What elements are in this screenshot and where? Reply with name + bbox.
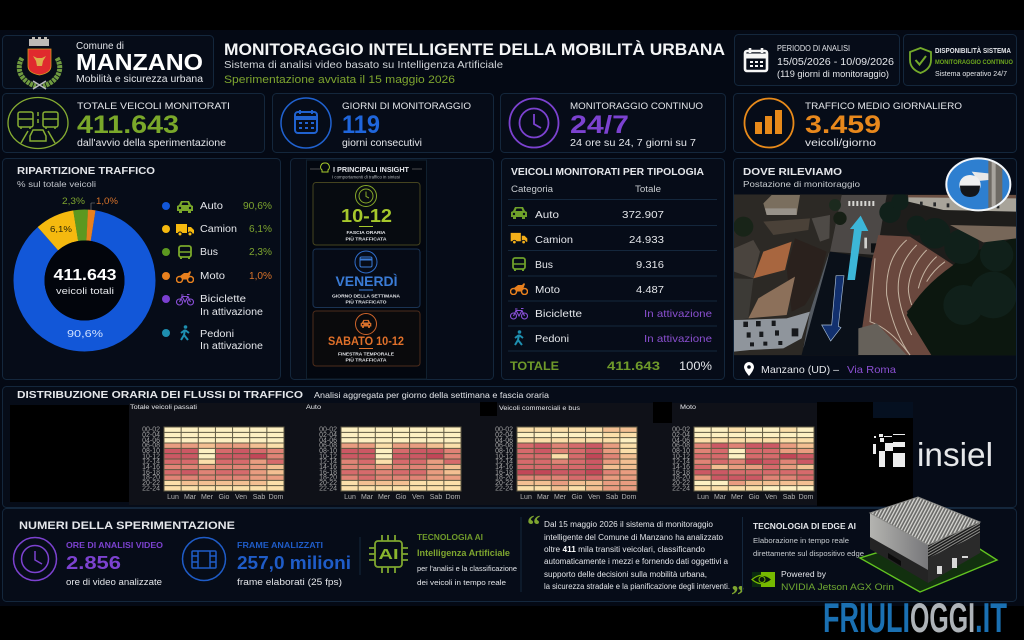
heatmap: moto: 06-08 [672,443,690,450]
icon: blue calendar [281,98,331,148]
donut chart: 411.643 [54,267,117,284]
edge AI text: TECNOLOGIA DI EDGE AI [753,521,856,531]
heatmap: veicoli commerciali e bus: Mer [554,494,567,501]
panel: distribuzione oraria [2,386,1016,508]
table heading [511,166,704,194]
watermark: FriuliOggi.it: .IT [975,594,1007,640]
KPI text: 3.459 [805,111,881,139]
inset: surveillance camera [945,157,1012,212]
heatmap: moto: Sab [783,494,795,501]
heatmap: auto: 12-14 [319,459,337,466]
table rows: Biciclette [535,308,582,320]
stat: frame analizzati: frame elaborati (25 fps) [237,577,342,587]
KPI card: traffico medio giornaliero [734,94,1016,152]
quote text: “ [527,510,540,540]
powered by text: Powered by [781,569,827,579]
heatmap: moto: 04-06 [672,437,690,444]
KPI text: MONITORAGGIO CONTINUO [570,101,703,112]
table total [510,359,712,373]
table total: 411.643 [607,359,660,373]
icon: purple clock [510,98,558,148]
legend: Pedoni [200,329,234,340]
watermark: FriuliOggi.it: FRIULI [823,594,910,640]
table heading: Categoria [511,184,553,194]
table rows: Camion [535,234,573,246]
table rows: In attivazione [644,333,712,345]
location caption: Manzano (UD) – [761,364,839,376]
insight card: sabato [313,311,420,366]
heatmap: auto: 14-16 [319,464,337,471]
heatmap: totale veicoli passati: 10-12 [142,453,160,460]
heatmap: veicoli commerciali e bus: Ven [588,494,600,501]
heatmap: totale veicoli passati: Lun [167,494,179,501]
header panel: comune di Manzano [2,36,214,89]
stat: tecnologia AI: dei veicoli in tempo reale [417,580,506,587]
table heading: VEICOLI MONITORATI PER TIPOLOGIA [511,166,704,178]
heatmap: auto: 22-24 [319,485,337,492]
legend: Camion [200,224,237,235]
donut chart: 2,3% [62,196,85,206]
insight card: fascia oraria: FASCIA ORARIA [346,230,386,236]
heatmap: moto: 08-10 [672,448,690,455]
KPI text: 411.643 [77,111,179,139]
panel: disponibilità sistema [904,34,1016,86]
heatmap: moto: Mer [731,494,744,501]
heatmap: moto: 18-20 [672,475,690,482]
insight card: fascia oraria [313,182,420,245]
quote text: oltre 411 mila transiti veicolari, classificando [544,545,706,554]
heading: RIPARTIZIONE TRAFFICO [17,165,155,177]
heatmap: moto: 20-22 [672,480,690,487]
heatmap: totale veicoli passati: Ven [235,494,247,501]
KPI text: TRAFFICO MEDIO GIORNALIERO [805,101,962,112]
heatmap: auto: 02-04 [319,432,337,439]
municipality name [76,40,203,85]
heatmap: veicoli commerciali e bus: Sab [606,494,618,501]
legend [162,201,272,352]
period text: (119 giorni di monitoraggio) [777,69,889,80]
table rows [510,207,712,345]
KPI text: dall'avvio della sperimentazione [77,138,226,149]
donut chart: 90,6% [67,329,103,340]
heatmap: auto: 00-02 [319,426,337,434]
KPI text: 24 ore su 24, 7 giorni su 7 [570,138,696,149]
heatmap: totale veicoli passati: 06-08 [142,443,160,450]
legend: 6,1% [249,224,272,235]
KPI text: GIORNI DI MONITORAGGIO [342,101,471,112]
quote text: la sicurezza stradale e la pianificazione degli interventi. [544,582,730,591]
panel: ripartizione traffico [2,158,280,380]
heatmap: totale veicoli passati: 12-14 [142,459,160,466]
heatmap: auto: Lun [344,494,356,501]
KPI text: veicoli/giorno [805,138,877,149]
table rows: 9.316 [636,259,664,271]
heatmap: moto: Lun [697,494,709,501]
heatmap: auto: 04-06 [319,437,337,444]
legend: Bus [200,247,218,258]
powered by text [781,569,894,593]
insight card: sabato: PIÙ TRAFFICATA [346,356,387,364]
legend: Moto [200,271,225,282]
icon: calendar [745,48,767,71]
heatmap: veicoli commerciali e bus: Lun [520,494,532,501]
heatmap: totale veicoli passati: 22-24 [142,485,160,492]
KPI text [805,101,962,149]
heatmap: auto: Dom [446,494,461,501]
stat: tecnologia AI: TECNOLOGIA AI [417,533,483,542]
heatmap: totale veicoli passati: 08-10 [142,448,160,455]
donut chart: 1,0% [96,196,118,206]
heatmap: totale veicoli passati: 04-06 [142,437,160,444]
heatmap: veicoli commerciali e bus: 02-04 [495,432,513,439]
heatmap: auto: 10-12 [319,453,337,460]
insight card: fascia oraria: 10-12 [341,206,392,226]
availability text: MONITORAGGIO CONTINUO [935,59,1013,66]
heading [17,389,549,401]
heatmap: totale veicoli passati: 00-02 [142,426,160,434]
insight heading: I comportamenti di traffico in sintesi [332,174,400,180]
table rows: Auto [535,209,559,221]
heatmap: auto: Ven [412,494,424,501]
heading: Analisi aggregata per giorno della settimana e fascia oraria [314,390,549,400]
KPI text: 119 [342,111,380,139]
heatmap: auto: 06-08 [319,443,337,450]
heatmap: veicoli commerciali e bus: Veicoli commerciali e bus [499,405,581,412]
availability text: DISPONIBILITÀ SISTEMA [935,46,1011,55]
stat: frame analizzati [182,538,351,587]
heading: DISTRIBUZIONE ORARIA DEI FLUSSI DI TRAFFICO [17,389,303,401]
panel: numeri della sperimentazione [2,508,1016,610]
heading: NUMERI DELLA SPERIMENTAZIONE [19,520,235,532]
heatmap: auto: Gio [396,494,407,501]
arrow: down (navy) [822,276,844,341]
legend: 2,3% [249,247,272,258]
heatmap: totale veicoli passati: 02-04 [142,432,160,439]
table rows: 372.907 [622,209,664,221]
table rows: 4.487 [636,284,664,296]
device: NVIDIA Jetson box [860,497,997,592]
heatmap: veicoli commerciali e bus: 00-02 [495,426,513,434]
heatmap: totale veicoli passati: 18-20 [142,475,160,482]
heatmap: totale veicoli passati: 16-18 [142,469,160,476]
quote text: intelligente del Comune di Manzano ha analizzato [544,533,724,542]
KPI card: monitoraggio continuo [500,94,726,152]
period text [777,44,894,80]
KPI card: giorni di monitoraggio [272,94,494,152]
KPI text: giorni consecutivi [342,138,422,149]
table rows: Moto [535,284,560,296]
heatmap: auto: 16-18 [319,469,337,476]
heatmap: veicoli commerciali e bus: 04-06 [495,437,513,444]
title block: MONITORAGGIO INTELLIGENTE DELLA MOBILITÀ URBANA [224,40,725,59]
arrow: up (cyan) [847,216,868,280]
insight card: venerdì: GIORNO DELLA SETTIMANA [332,294,401,300]
insight card: sabato: SABATO 10-12 [328,336,404,348]
legend: 1,0% [249,271,272,282]
heatmap: auto: 18-20 [319,475,337,482]
KPI text: 24/7 [570,111,629,139]
insight heading: I PRINCIPALI INSIGHT [333,165,409,174]
icon: shield check [910,48,931,73]
table total: TOTALE [510,359,559,373]
icon: orange bar chart [744,98,794,148]
municipality name: Mobilità e sicurezza urbana [76,74,203,85]
quote text: automaticamente i mezzi e fornendo dati oggettivi a [544,557,729,566]
stat: ore di analisi video: ORE DI ANALISI VIDEO [66,541,163,550]
quote text [527,510,744,610]
KPI text: TOTALE VEICOLI MONITORATI [77,101,230,112]
heatmap: totale veicoli passati: Sab [253,494,265,501]
legend: Biciclette [200,294,247,305]
insight card: venerdì [313,249,420,308]
heatmap: auto [306,404,461,501]
stat: tecnologia AI [369,533,517,587]
legend: In attivazione [200,307,263,318]
panel: veicoli monitorati per tipologia [502,158,724,380]
table rows: 24.933 [629,234,664,246]
legend: Auto [200,201,223,212]
heatmap: moto: 22-24 [672,485,690,492]
insiel logo: insiel [917,436,993,473]
table total: 100% [679,361,712,373]
period text: 15/05/2026 - 10/09/2026 [777,57,894,68]
table rows: Pedoni [535,333,569,345]
heatmap: totale veicoli passati: 20-22 [142,480,160,487]
KPI text [77,101,230,149]
heatmap: moto [672,404,814,501]
title block [224,40,725,86]
heatmap: moto: 00-02 [672,426,690,434]
heatmap: totale veicoli passati: Totale veicoli passati [130,404,198,411]
heatmap: veicoli commerciali e bus: 16-18 [495,469,513,476]
stat: ore di analisi video: ore di video analizzate [66,577,162,587]
table heading: Totale [635,184,661,194]
heatmap: veicoli commerciali e bus: 22-24 [495,485,513,492]
heading: DOVE RILEVIAMO [743,166,842,178]
heatmap: totale veicoli passati: Gio [219,494,230,501]
heading [743,166,860,189]
heatmap: veicoli commerciali e bus [495,405,637,501]
location caption: Via Roma [847,364,896,376]
stat: tecnologia AI: per l'analisi e la classificazione [417,566,517,573]
heatmap: totale veicoli passati: Mer [201,494,214,501]
KPI text [570,101,703,149]
table rows: Bus [535,259,553,271]
heatmap: auto: 20-22 [319,480,337,487]
municipality name: MANZANO [76,49,203,75]
heatmap: moto: 12-14 [672,459,690,466]
location caption [744,362,896,376]
heatmap: moto: Moto [680,404,696,411]
title block: Sperimentazione avviata il 15 maggio 2026 [224,74,455,86]
period text: PERIODO DI ANALISI [777,44,850,53]
availability text [935,46,1013,78]
stat: frame analizzati: 257,0 milioni [237,553,351,573]
heatmap: auto: 08-10 [319,448,337,455]
donut chart [6,196,163,359]
insight card: sabato: FINESTRA TEMPORALE [338,352,395,358]
heatmap: auto: Mer [378,494,391,501]
heatmap: auto: Sab [430,494,442,501]
heatmap: totale veicoli passati: Mar [184,494,197,501]
insiel logo [817,402,993,506]
heatmap: totale veicoli passati [130,404,284,501]
panel: periodo di analisi [734,34,900,86]
quote text: supporto delle decisioni sulla mobilità urbana, [544,570,707,579]
panel: i principali insight [290,158,494,380]
heatmap: moto: Ven [765,494,777,501]
stat: ore di analisi video: 2.856 [66,553,121,573]
legend: 90,6% [243,201,272,212]
stat: ore di analisi video [14,538,163,587]
heatmap: moto: 02-04 [672,432,690,439]
title block: Sistema di analisi video basato su Intelligenza Artificiale [224,59,503,71]
KPI card: totale veicoli [2,94,264,152]
stat: tecnologia AI: AI [378,546,398,563]
heatmap: veicoli commerciali e bus: 12-14 [495,459,513,466]
heatmap: moto: Dom [799,494,814,501]
heatmap: veicoli commerciali e bus: Gio [572,494,583,501]
heading: % sul totale veicoli [17,179,96,189]
heatmap: moto: Mar [714,494,727,501]
donut chart: veicoli totali [56,286,114,297]
heatmap: veicoli commerciali e bus: Mar [537,494,550,501]
insight heading [310,163,422,180]
heatmap: moto: 16-18 [672,469,690,476]
table rows: In attivazione [644,308,712,320]
stat: tecnologia AI: Intelligenza Artificiale [417,548,510,558]
heatmap: auto: Mar [361,494,374,501]
icon: traffic vehicles [8,98,68,148]
panel: dove rileviamo [733,155,1023,380]
heatmap: totale veicoli passati: Dom [269,494,284,501]
heading [17,165,155,189]
icon: municipal crest [19,37,60,89]
aerial photo with arrows [733,193,1023,358]
watermark: FriuliOggi.it: OGGI [910,594,975,640]
insight card: fascia oraria: PIÙ TRAFFICATA [346,236,387,242]
powered by text: NVIDIA Jetson AGX Orin [781,582,894,593]
edge AI text: Elaborazione in tempo reale [753,536,849,545]
edge AI text [753,521,864,558]
heatmap: moto: 10-12 [672,453,690,460]
quote text: Dal 15 maggio 2026 il sistema di monitoraggio [544,520,714,529]
quote text: ” [731,580,744,610]
heatmap: veicoli commerciali e bus: 06-08 [495,443,513,450]
insight card: venerdì: VENERDÌ [336,273,398,289]
heatmap: totale veicoli passati: 14-16 [142,464,160,471]
heatmap: veicoli commerciali e bus: Dom [622,494,637,501]
heatmap: veicoli commerciali e bus: 08-10 [495,448,513,455]
heatmap: moto: Gio [749,494,760,501]
municipality name: Comune di [76,40,124,52]
KPI text [342,101,471,149]
availability text: Sistema operativo 24/7 [935,71,1007,78]
heatmap: veicoli commerciali e bus: 10-12 [495,453,513,460]
heatmap: auto: Auto [306,404,321,411]
heatmap: veicoli commerciali e bus: 14-16 [495,464,513,471]
insight card: venerdì: PIÙ TRAFFICATO [346,298,387,306]
icon: NVIDIA logo [752,572,775,587]
heatmap: moto: 14-16 [672,464,690,471]
heatmap: veicoli commerciali e bus: 18-20 [495,475,513,482]
stat: frame analizzati: FRAME ANALIZZATI [237,541,323,550]
legend: In attivazione [200,341,263,352]
heatmap: veicoli commerciali e bus: 20-22 [495,480,513,487]
donut chart: 6,1% [50,224,73,234]
heading: Postazione di monitoraggio [743,179,860,189]
edge AI text: direttamente sul dispositivo edge [753,549,864,558]
